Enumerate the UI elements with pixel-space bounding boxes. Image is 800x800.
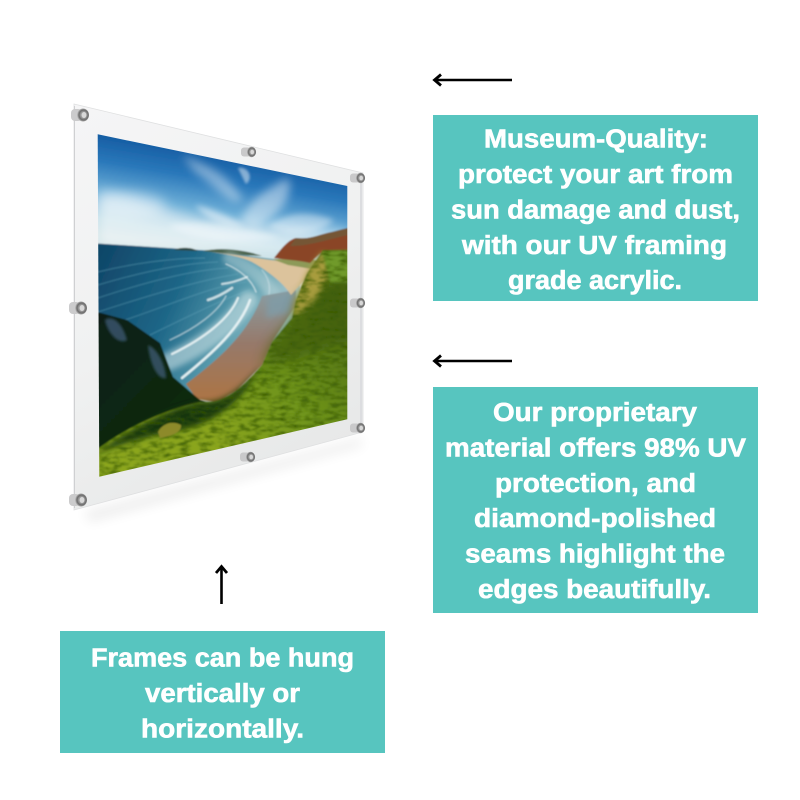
text: uv protection: diamond-polished xyxy=(474,505,716,533)
text: museum quality: with our UV framing xyxy=(461,232,727,260)
text: museum quality xyxy=(451,126,740,295)
rock highlights xyxy=(105,318,166,378)
text: museum quality: Museum-Quality: xyxy=(484,126,708,154)
dark shadow over grass xyxy=(90,365,262,458)
text: uv protection: material offers 98% UV xyxy=(445,434,746,462)
dark foreground hill xyxy=(98,312,207,449)
yellow bush xyxy=(158,423,181,438)
panel: uv protection xyxy=(433,387,758,613)
arrow: uv protection xyxy=(434,356,512,366)
distant headland xyxy=(174,248,198,251)
frame shadow xyxy=(84,438,362,522)
top centre standoff xyxy=(241,147,256,157)
text: uv protection: protection, and xyxy=(495,470,696,498)
text: museum quality: sun damage and dust, xyxy=(451,196,740,224)
text: hanging orientation: Frames can be hung xyxy=(91,645,354,673)
text: museum quality: protect your art from xyxy=(458,161,733,189)
sea swell lines xyxy=(98,257,228,337)
text: uv protection: edges beautifully. xyxy=(478,576,711,604)
framed landscape photo xyxy=(98,134,348,477)
acrylic panel xyxy=(74,104,363,510)
text: museum quality: grade acrylic. xyxy=(508,267,682,295)
text: uv protection: seams highlight the xyxy=(465,541,725,569)
top left standoff xyxy=(71,108,89,122)
text: uv protection xyxy=(445,399,746,604)
product: wall-mounted acrylic frame xyxy=(69,104,365,522)
text: hanging orientation: horizontally. xyxy=(141,716,304,744)
cliff ochre xyxy=(292,252,332,318)
wet sand xyxy=(186,290,296,402)
sky xyxy=(98,134,348,261)
middle right standoff xyxy=(350,298,365,308)
sea xyxy=(90,243,300,395)
green hillside xyxy=(90,250,355,485)
middle left standoff xyxy=(69,302,87,314)
bottom left standoff xyxy=(69,494,87,506)
acrylic left edge xyxy=(74,106,76,508)
text: hanging orientation: vertically or xyxy=(145,680,300,708)
wet sand reflection xyxy=(266,297,290,318)
text: uv protection: Our proprietary xyxy=(493,399,698,427)
upper hillside shade xyxy=(262,275,352,365)
arrow: museum quality xyxy=(434,74,512,86)
upper beach xyxy=(203,251,311,295)
panel: museum quality xyxy=(433,115,758,301)
red hill xyxy=(274,227,352,263)
top right standoff xyxy=(350,173,365,183)
text: hanging orientation xyxy=(91,645,354,744)
lower right standoff xyxy=(350,423,365,433)
acrylic right edge xyxy=(360,175,362,431)
panel: hanging orientation xyxy=(60,631,385,753)
surf xyxy=(168,258,276,378)
bottom centre standoff xyxy=(240,452,255,462)
grass texture xyxy=(98,250,348,480)
arrow: hanging orientation xyxy=(216,566,227,604)
clouds xyxy=(98,155,348,255)
